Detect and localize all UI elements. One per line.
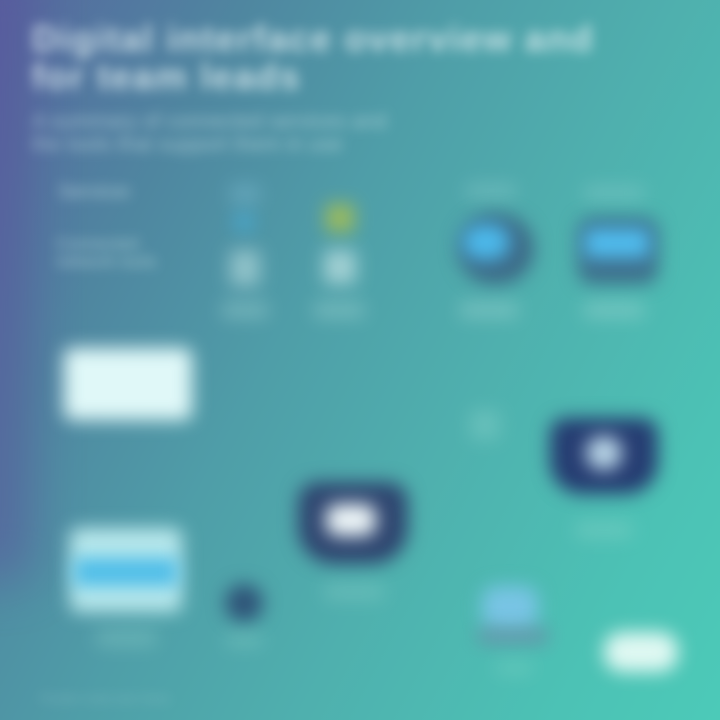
icon: dark wide screen — [568, 182, 670, 324]
subtitle — [30, 110, 389, 156]
icon: small laptop — [474, 578, 552, 674]
label: first column text: network tools — [56, 252, 156, 271]
small faint marker — [470, 410, 500, 440]
icon: dark badge centre — [286, 470, 420, 602]
icon: dark round screen — [449, 180, 544, 324]
panel: white cloud — [604, 632, 678, 672]
icon: dark dot — [216, 574, 272, 648]
icon: dark badge right — [537, 404, 671, 542]
icon: yellow dot column — [312, 194, 367, 324]
footer text: Footer note text here — [40, 690, 170, 706]
panel: blue striped card — [58, 516, 194, 650]
icon: blue dot column — [220, 182, 270, 324]
top row labels — [56, 181, 156, 271]
title — [26, 18, 598, 97]
title: for team leads — [32, 56, 301, 97]
subtitle: the tools that support them in use — [32, 133, 343, 156]
label: first column text — [56, 235, 156, 271]
subtitle: A summary of connected services and — [32, 110, 387, 133]
panel: white card — [64, 348, 192, 420]
